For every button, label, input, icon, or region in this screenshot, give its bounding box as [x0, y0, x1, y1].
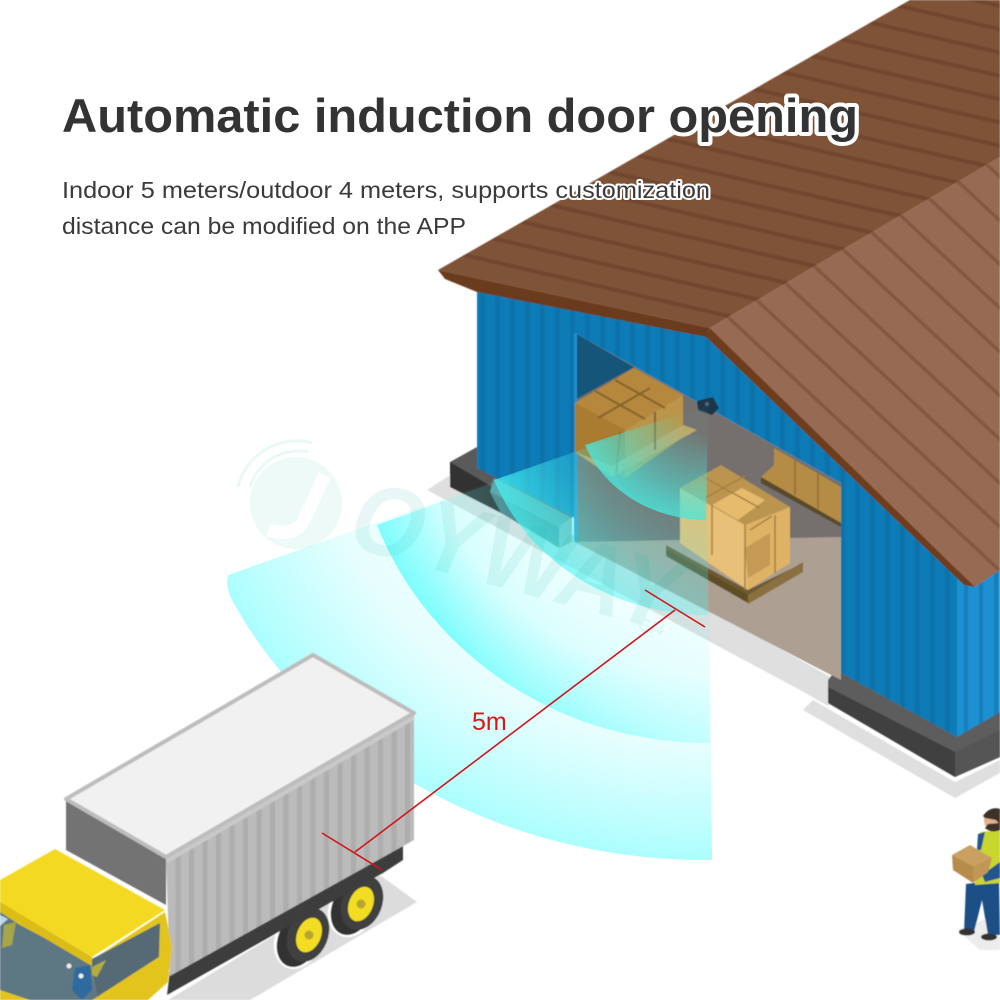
carried box: [952, 845, 992, 883]
subtitle line 1: Indoor 5 meters/outdoor 4 meters, supports customization: [62, 177, 710, 203]
worker shoes: [959, 928, 997, 940]
cargo box: side: [166, 713, 414, 976]
title: Automatic induction door opening: [62, 89, 858, 142]
back pallet of boxes: [575, 368, 697, 478]
watermark domain: .CN: [631, 613, 666, 640]
loading curb: [490, 478, 572, 548]
detection zone: innermost: [585, 405, 708, 520]
wall: front: [477, 285, 957, 737]
cargo box: top: [66, 655, 414, 857]
cargo box: side top rail: [166, 711, 414, 864]
truck ground shadow: [168, 873, 417, 1000]
cargo box: rear face: [66, 799, 166, 905]
subtitle: [62, 177, 710, 239]
detection zone: third: [494, 448, 708, 615]
door sensor: [697, 397, 719, 415]
watermark logo: [238, 441, 342, 549]
detection zone: second: [377, 482, 710, 743]
wheels: [265, 870, 391, 976]
worker carrying box: [952, 808, 1000, 950]
door jamb: [574, 333, 577, 542]
doorway interior: [575, 333, 841, 680]
ground apron and shadow: [427, 472, 1000, 798]
watermark: [238, 441, 701, 652]
cab: [0, 849, 172, 1000]
wall: corner side: [957, 560, 1000, 737]
subtitle line 2: distance can be modified on the APP: [62, 213, 466, 239]
chassis: [167, 840, 403, 995]
roof: left slope: [438, 0, 1000, 337]
worker torso and vest: [975, 830, 1000, 885]
foundation plinth: [450, 447, 1000, 777]
detection zone: 5m outer: [227, 405, 712, 860]
far pallet of boxes: [761, 448, 841, 527]
worker legs: [964, 880, 1000, 935]
dimension label: 5m: [472, 708, 507, 736]
worker shadow: [957, 917, 1000, 950]
watermark wordmark: OYWAY: [333, 462, 701, 652]
dimension line: 5m: [322, 590, 705, 870]
warehouse building: [427, 0, 1000, 798]
front pallet of boxes: [666, 465, 803, 604]
worker head: [983, 808, 1000, 832]
roof: right slope: [706, 157, 1000, 587]
delivery truck: [0, 655, 417, 1000]
sensor detection zones: [227, 405, 712, 860]
